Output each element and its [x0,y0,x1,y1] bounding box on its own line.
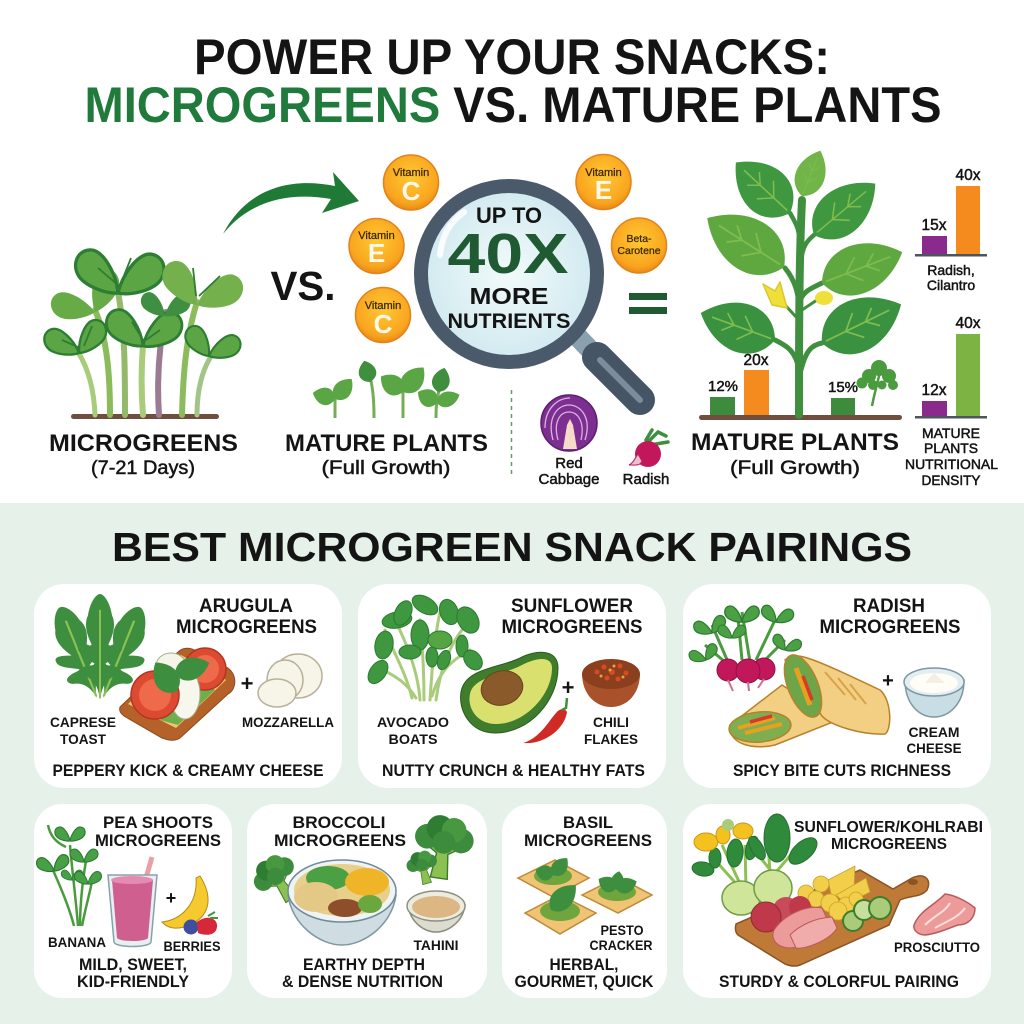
icon: avocado [461,652,558,733]
icon: cream cheese bowl [904,668,964,717]
heading: pea shoots microgreens [95,813,221,850]
icon: cilantro [856,360,898,406]
bar chart: radish, cilantro [915,167,987,293]
label: mature plants right: MATURE PLANTS [691,429,899,456]
heading: arugula microgreens: ARUGULA [199,596,293,617]
label: mature plants right [691,429,899,479]
icon: mozzarella [258,654,322,707]
heading: basil microgreens: BASIL [563,813,613,832]
icon: wrap [728,650,890,747]
label: pesto cracker: PESTO [600,923,644,938]
bar chart: radish, cilantro: Cilantro [927,277,975,293]
label: red cabbage: Cabbage [539,471,599,488]
bar chart: mature plant bars: 15% [828,379,858,396]
icon: banana and berries [162,876,218,935]
label: mature plants left: (Full Growth) [322,458,450,479]
heading: basil microgreens: MICROGREENS [524,831,652,850]
heading: sunflower kohlrabi microgreens: SUNFLOWER/KOHLRABI [794,819,983,836]
label: mozzarella: MOZZARELLA [242,714,334,730]
icon: vitamin E left: Vitamin [358,230,395,242]
icon: magnifying glass: NUTRIENTS [448,310,570,333]
label: microgreens: MICROGREENS [49,430,238,457]
icon: sunflower sprouts [364,591,486,700]
heading: sunflower kohlrabi microgreens: MICROGREENS [831,836,947,853]
bar chart: radish, cilantro: 40x [956,167,981,184]
icon: magnifying glass [421,186,640,400]
description: MILD, SWEET, [79,955,187,974]
bar chart: mature plant bars [708,352,858,415]
icon: magnifying glass: MORE [470,283,548,309]
label: cream cheese [906,724,962,756]
bar chart: mature plants nutritional density: PLANTS [924,440,978,456]
icon: vitamin C lower: Vitamin [365,300,401,312]
title [84,29,942,133]
panel: sunflower kohlrabi [683,804,991,998]
bar chart: mature plants nutritional density: 12x [922,382,947,399]
description [77,955,190,991]
label: mature plants right: (Full Growth) [730,458,860,479]
description [282,955,443,991]
icon: pesto crackers [518,853,652,934]
panel: pea shoots [34,804,232,998]
heading: sunflower kohlrabi microgreens [794,819,983,853]
label: avocado boats: AVOCADO [377,714,449,730]
text: plus: + [241,671,253,696]
heading: arugula microgreens [176,596,317,638]
label: banana: BANANA [48,935,106,950]
bar chart: mature plants nutritional density: MATURE [922,425,980,441]
bar chart: mature plants nutritional density: 40x [956,315,981,332]
description: PEPPERY KICK & CREAMY CHEESE [52,761,324,780]
label: radish: Radish [623,471,669,488]
label: mature plants left: MATURE PLANTS [285,430,488,457]
heading: sunflower microgreens: SUNFLOWER [511,596,633,617]
icon: red cabbage [541,395,597,451]
icon: mature plant [692,145,913,420]
description: NUTTY CRUNCH & HEALTHY FATS [382,761,645,780]
icon: chili flakes bowl [582,659,640,707]
icon: beta-carotene: Beta- [626,233,652,245]
icon: charcuterie board [735,866,929,966]
heading: pea shoots microgreens: PEA SHOOTS [103,813,213,832]
bar chart: mature plants nutritional density [905,315,998,488]
arrow: microgreens to nutrients [223,172,359,234]
label: chili flakes: CHILI [593,714,629,730]
icon: vitamin C top [384,155,438,210]
description: EARTHY DEPTH [303,955,425,974]
icon: radish sprouts [688,604,803,691]
icon: smoothie [108,857,157,946]
icon: radish [629,430,668,467]
icon: vitamin E right [576,154,631,210]
bar chart: mature plants nutritional density: DENSITY [922,472,981,488]
label: red cabbage [539,455,599,488]
label: avocado boats: BOATS [388,731,438,747]
heading: pea shoots microgreens: MICROGREENS [95,831,221,850]
panel: radish [683,584,991,788]
icon: microgreens sprouts [42,249,246,419]
label: red cabbage: Red [555,455,583,472]
icon: vitamin C lower: C [374,309,393,339]
description: STURDY & COLORFUL PAIRING [719,972,959,991]
label: caprese toast: TOAST [60,731,106,747]
heading: broccoli microgreens: MICROGREENS [274,831,406,850]
heading: radish microgreens: MICROGREENS [820,617,960,638]
description: & DENSE NUTRITION [282,972,443,991]
icon: vitamin E right: E [595,175,612,205]
icon: equals sign [629,293,667,314]
description [514,955,654,991]
description: KID-FRIENDLY [77,972,190,991]
icon: pea shoots [36,825,102,926]
icon: vitamin C top: C [402,176,421,206]
label: prosciutto: PROSCIUTTO [894,940,980,955]
label: tahini: TAHINI [414,938,458,953]
bar chart: radish, cilantro: 15x [922,217,947,234]
label: mature plants left [285,430,488,479]
label: chili flakes [584,714,638,747]
icon: magnifying glass: 40X [448,222,568,286]
icon: tahini bowl [407,891,465,932]
label: chili flakes: FLAKES [584,731,638,747]
panel: basil [502,804,667,998]
icon: chili pepper [523,698,567,743]
icon: beta-carotene: Carotene [617,245,661,257]
heading: sunflower microgreens [502,596,642,638]
icon: prosciutto [914,894,975,935]
label: pesto cracker: CRACKER [590,938,653,953]
icon: broccoli large [410,812,477,882]
icon: kohlrabi and flowers [691,814,822,915]
title: POWER UP YOUR SNACKS: [194,29,830,85]
icon: broccoli left [246,847,309,912]
heading: radish microgreens: RADISH [853,596,925,617]
label: avocado boats [377,714,449,747]
description: HERBAL, [550,955,618,974]
divider: dashed [510,390,512,478]
icon: arugula leaves [38,594,162,707]
label: cream cheese: CREAM [908,724,960,740]
description: GOURMET, QUICK [514,972,654,991]
text: plus: + [882,670,894,692]
icon: beta-carotene [612,218,666,273]
label: microgreens: (7-21 Days) [91,458,195,479]
panel: broccoli [246,804,487,998]
icon: vitamin E left: E [368,238,385,268]
heading: best pairings: BEST MICROGREEN SNACK PAIRINGS [112,524,912,570]
bar chart: mature plant bars: 12% [708,378,738,395]
label: caprese toast: CAPRESE [50,714,116,730]
label: berries: BERRIES [164,939,220,954]
text: vs: VS. [270,263,336,309]
heading: broccoli microgreens: BROCCOLI [292,813,386,832]
bar chart: radish, cilantro: Radish, [927,262,975,278]
icon: vitamin E right: Vitamin [585,167,622,179]
background: pairings section [0,503,1024,1024]
bar chart: mature plant bars: 20x [744,352,769,369]
label: pesto cracker [590,923,653,953]
heading: basil microgreens [524,813,652,850]
heading: radish microgreens [820,596,960,638]
heading: broccoli microgreens [274,813,406,850]
icon: vitamin C lower [356,288,410,342]
text: plus: + [166,888,176,908]
icon: magnifying glass: UP TO [476,203,542,228]
description: SPICY BITE CUTS RICHNESS [733,761,951,780]
icon: grain bowl [288,860,396,945]
icon: caprese toast [120,648,235,740]
label: cream cheese: CHEESE [906,740,962,756]
label: caprese toast [50,714,116,747]
text: plus: + [562,675,574,700]
icon: broccoli small right [404,848,442,887]
label: microgreens [49,430,238,479]
icon: small seedlings [311,358,462,418]
panel: arugula [34,584,342,788]
icon: vitamin C top: Vitamin [393,167,429,179]
panel: sunflower [358,584,666,788]
heading: sunflower microgreens: MICROGREENS [502,617,642,638]
icon: vitamin E left [349,218,404,274]
heading: arugula microgreens: MICROGREENS [176,617,317,638]
title: MICROGREENS VS. MATURE PLANTS [84,77,942,133]
bar chart: mature plants nutritional density: NUTRITIONAL [905,456,998,472]
